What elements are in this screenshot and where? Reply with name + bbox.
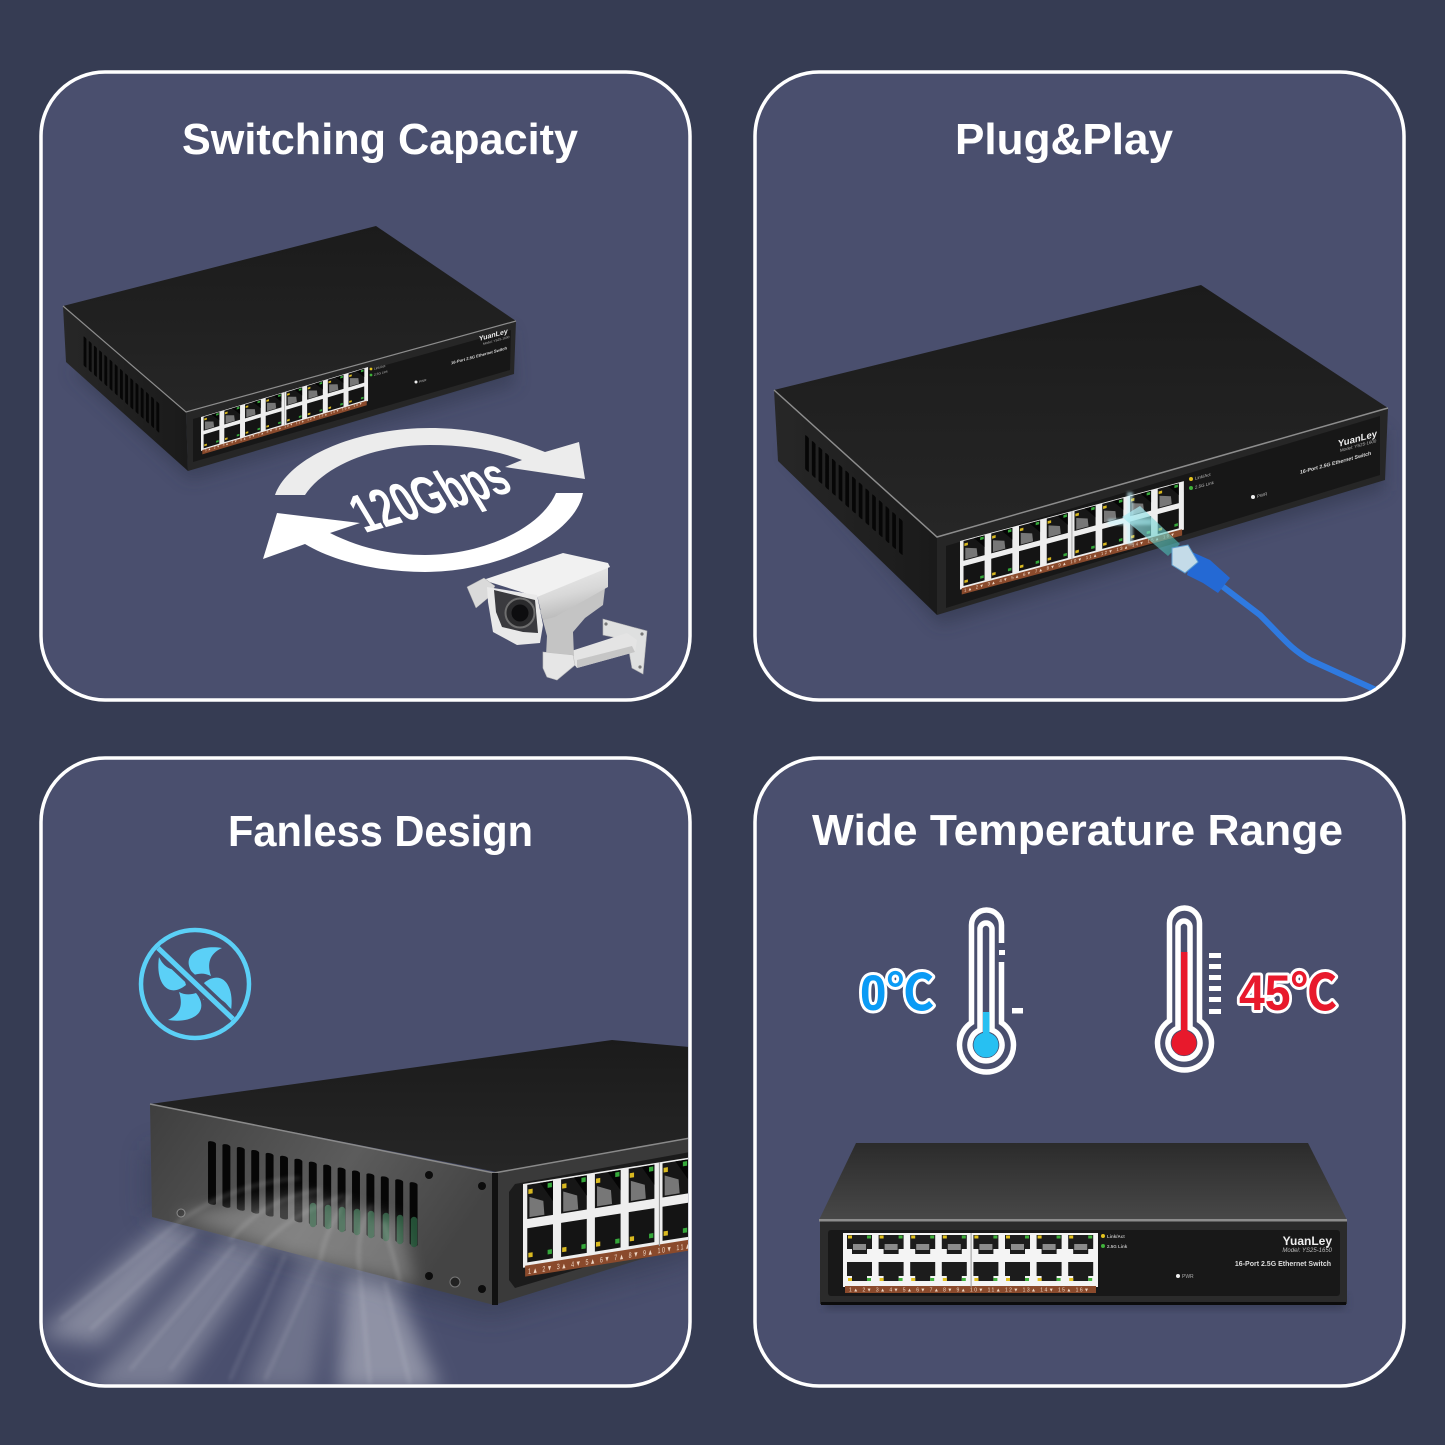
switch product with cable: PWR xyxy=(1257,491,1268,499)
switch product, angled view: 16-Port 2.5G Ethernet Switch xyxy=(451,345,507,365)
heading: switching capacity: Switching Capacity xyxy=(182,115,579,164)
switch product with cable: 16-Port 2.5G Ethernet Switch xyxy=(1300,451,1371,476)
switch product, front view: Link/Act xyxy=(1107,1234,1125,1239)
switch product with cable: Link/Act xyxy=(1195,472,1211,481)
switch product, front view: 2.5G Link xyxy=(1107,1244,1128,1249)
heading: fanless design: Fanless Design xyxy=(228,807,533,856)
heading: wide temperature range: Wide Temperature Range xyxy=(812,806,1343,855)
arrows: circular exchange xyxy=(263,428,585,572)
switch product, front view: PWR xyxy=(1182,1274,1194,1280)
airflow over the side wall xyxy=(175,1178,415,1285)
label: 45 degrees: 45℃ xyxy=(1239,965,1337,1021)
switch product, angled view: 2.5G Link xyxy=(374,369,388,377)
icon: security camera xyxy=(467,553,647,680)
switch product with cable: 1▲ 2▼ 3▲ 4▼ 5▲ 6▼ 7▲ 8▼ 9▲ 10▼ 11▲ 12▼ 13▲ 14▼ 15▲ 16▼ xyxy=(964,532,1175,593)
switch product with cable: 2.5G Link xyxy=(1195,480,1215,490)
icon: hot thermometer xyxy=(1158,908,1221,1070)
heading: plug and play: Plug&Play xyxy=(955,115,1174,164)
switch product with cable: YuanLey xyxy=(1338,428,1378,450)
switch product, front view: 16-Port 2.5G Ethernet Switch xyxy=(1235,1261,1331,1268)
switch product, angled view: PWR xyxy=(419,378,427,384)
label: 120Gbps: 120Gbps xyxy=(339,447,522,544)
panel: fanless design xyxy=(39,756,692,1388)
panel: wide temperature range xyxy=(755,758,1404,1386)
switch product, front view: Model: YS25-1650 xyxy=(1282,1248,1333,1254)
icon: cold thermometer xyxy=(960,910,1023,1072)
switch product, angled view xyxy=(63,226,516,480)
switch product, front view: YuanLey xyxy=(1283,1234,1332,1248)
switch product, front view: 1▲ 2▼ 3▲ 4▼ 5▲ 6▼ 7▲ 8▼ 9▲ 10▼ 11▲ 12▼ 13▲ 14▼ 15▲ 16▼ xyxy=(849,1288,1089,1294)
cable: blue ethernet xyxy=(1108,492,1376,690)
airflow on the floor xyxy=(40,1222,440,1390)
panel: switching capacity xyxy=(41,72,690,700)
switch product, front view xyxy=(819,1143,1347,1309)
switch product, angled view: Model: YS25-1600 xyxy=(483,335,510,346)
switch product, angled view: Link/Act xyxy=(374,364,385,371)
switch product, angled view: YuanLey xyxy=(479,327,508,343)
icon: no fan xyxy=(141,930,249,1038)
switch product with cable xyxy=(774,285,1388,690)
airflow fine streaks xyxy=(62,1226,389,1379)
panel: plug and play xyxy=(755,72,1404,700)
switch product, angled view: 1▲ 2▼ 3▲ 4▼ 5▲ 6▼ 7▲ 8▼ 9▲ 10▼ 11▲ 12▼ 13▲ 14▼ 15▲ 16▼ xyxy=(205,402,362,452)
switch product with cable: Model: YS25-1600 xyxy=(1340,438,1377,453)
switch product, close-up: 1▲ 2▼ 3▲ 4▼ 5▲ 6▼ 7▲ 8▼ 9▲ 10▼ 11▲ 12▼ 13▲ 14▼ 15▲ 16▼ xyxy=(528,1227,785,1276)
switch product, close-up xyxy=(43,1040,688,1384)
label: 0 degrees: 0℃ xyxy=(860,965,934,1021)
